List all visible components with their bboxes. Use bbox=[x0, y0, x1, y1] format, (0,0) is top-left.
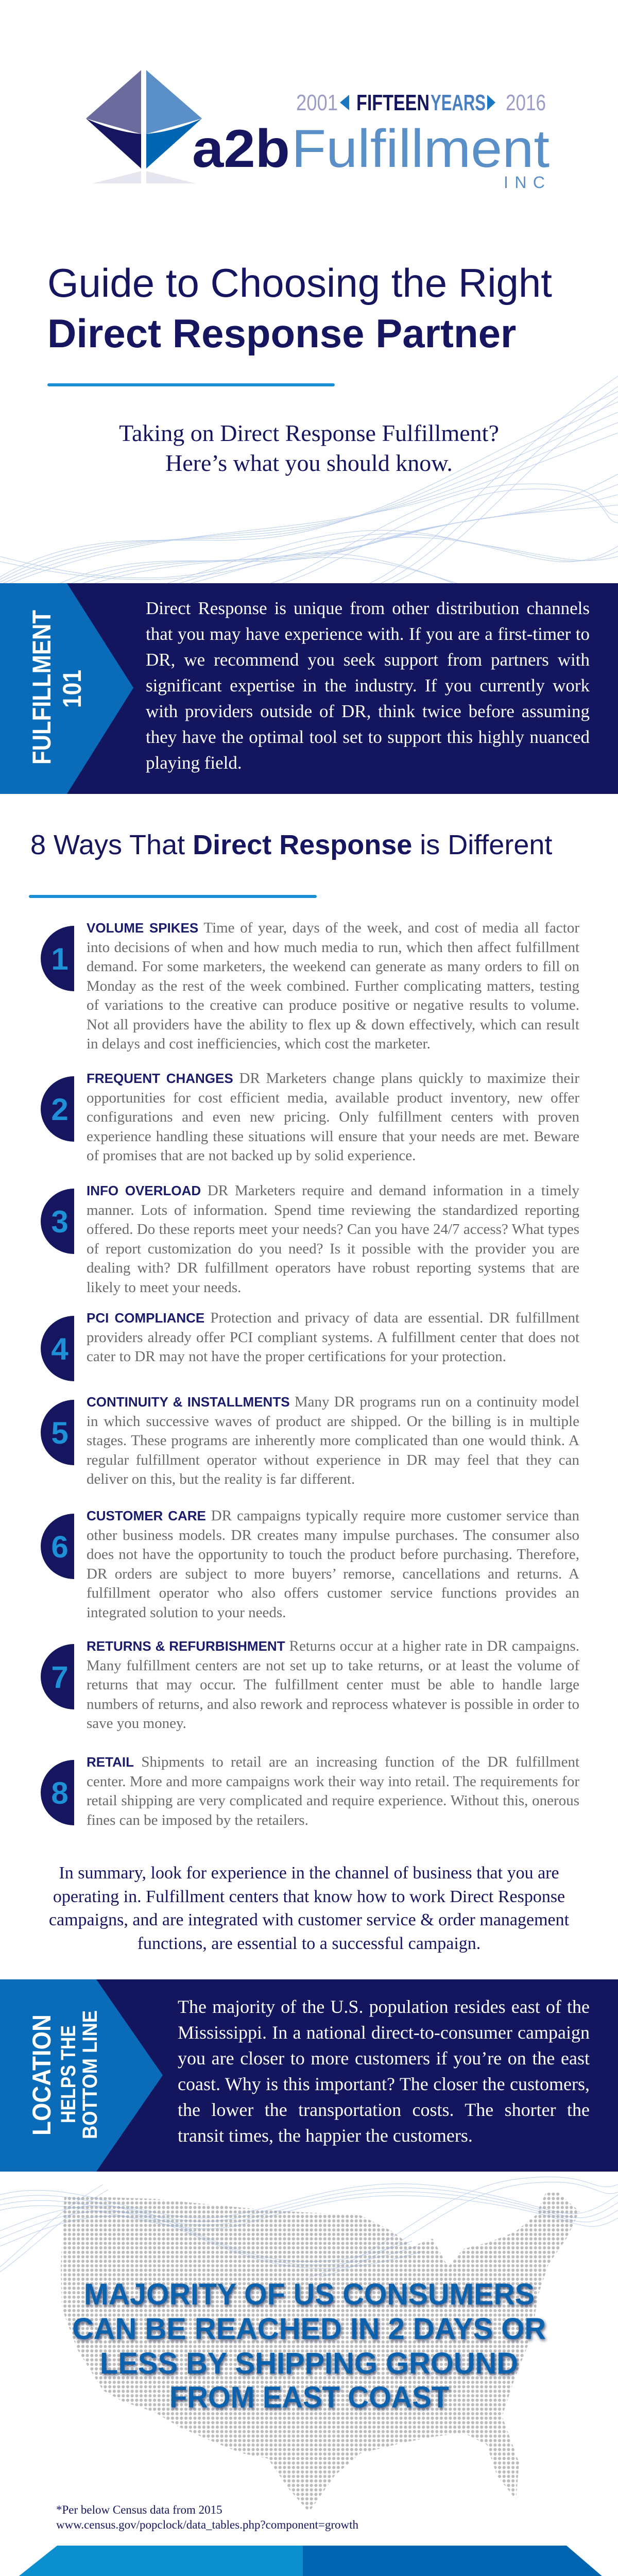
panel: location bbox=[0, 1979, 618, 2172]
icon: number 2: 2 bbox=[51, 1092, 68, 1127]
item 7: RETURNS & REFURBISHMENT Returns occur at a higher rate in DR campaigns. Many fulfillment centers are not set up to take returns, or at least the volume of returns that may occur. The fulfillment center must be able to handle large numbers of returns, and also rework and reprocess whatever is possible in order to save you money. bbox=[87, 1638, 579, 1732]
logo bbox=[86, 70, 550, 192]
subtitle bbox=[119, 420, 499, 476]
panel: fulfillment 101 bbox=[0, 583, 618, 794]
fifteen years tagline: FIFTEEN bbox=[356, 90, 430, 115]
icon: number 7 bbox=[41, 1644, 74, 1709]
waves over map bbox=[0, 2177, 618, 2277]
icon: number 5: 5 bbox=[51, 1416, 68, 1450]
headline on map: FROM EAST COAST bbox=[169, 2381, 449, 2414]
label: location helps the bottom line: LOCATION bbox=[27, 2014, 56, 2136]
icon: number 1: 1 bbox=[51, 942, 68, 976]
footnote: www.census.gov/popclock/data_tables.php?component=growth bbox=[56, 2518, 358, 2531]
icon: number 6 bbox=[41, 1514, 74, 1579]
label: location helps the bottom line: HELPS THE bbox=[57, 2025, 80, 2123]
text: location: The majority of the U.S. population resides east of the Mississippi. In a national direct-to-consumer campaign you are closer to more customers if you’re on the east coast. Why is this important? The closer the customers, the lower the transportation costs. The shorter the transit times, the happier the customers. bbox=[178, 1996, 590, 2146]
label: location helps the bottom line: BOTTOM LINE bbox=[79, 2010, 101, 2139]
label: fulfillment 101: 101 bbox=[58, 670, 87, 708]
title bbox=[47, 260, 552, 356]
item 8: RETAIL Shipments to retail are an increasing function of the DR fulfillment center. More and more campaigns work their way into retail. The requirements for retail shipping are very complicated and require experience. Without this, onerous fines can be imposed by the retailers. bbox=[87, 1754, 579, 1828]
map: dotted US with headline bbox=[0, 2176, 618, 2510]
item 5: CONTINUITY & INSTALLMENTS Many DR programs run on a continuity model in which successive waves of product are shipped. Or the billing is in multiple stages. These programs are inherently more complicated than one would think. A regular fulfillment operator without experience in DR may feel that they can deliver on this, but the reality is far different. bbox=[87, 1394, 579, 1487]
item 2: FREQUENT CHANGES DR Marketers change plans quickly to maximize their opportunities for cost efficient media, available product inventory, new offer configurations and even new pricing. Only fulfillment centers with proven experience handling these situations will ensure that your needs are met. Beware of promises that are not backed up by solid experience. bbox=[87, 1070, 579, 1164]
item 4: PCI COMPLIANCE Protection and privacy of data are essential. DR fulfillment providers already offer PCI compliant systems. A fulfillment center that does not cater to DR may not have the proper certifications for your protection. bbox=[87, 1310, 579, 1365]
label: fulfillment 101: FULFILLMENT bbox=[27, 610, 56, 765]
icon: number 4: 4 bbox=[51, 1332, 68, 1366]
icon: number 1 bbox=[41, 926, 74, 991]
headline on map: MAJORITY OF US CONSUMERS bbox=[84, 2278, 535, 2311]
summary text: In summary, look for experience in the channel of business that you are operating in. Fulfillment centers that know how to work Direct Response campaigns, and are integrated with customer service & order management functions, are essential to a successful campaign. bbox=[49, 1863, 569, 1953]
banner: west vs east bbox=[19, 2546, 602, 2576]
subtitle: Here’s what you should know. bbox=[165, 450, 453, 476]
icon: number 4 bbox=[41, 1316, 74, 1381]
text: fulfillment 101: Direct Response is unique from other distribution channels that you may have experience with. If you are a first-timer to DR, we recommend you seek support from partners with significant expertise in the industry. If you currently work with providers outside of DR, think twice before assuming they have the optimal tool set to support this highly nuanced playing field. bbox=[146, 598, 590, 773]
fifteen years tagline: YEARS bbox=[431, 90, 486, 115]
company name: a2b bbox=[192, 119, 290, 179]
company name: Fulfillment bbox=[291, 119, 550, 179]
subtitle: Taking on Direct Response Fulfillment? bbox=[119, 420, 499, 446]
icon: number 2 bbox=[41, 1076, 74, 1142]
icon: number 8: 8 bbox=[51, 1776, 68, 1810]
fifteen years tagline bbox=[296, 90, 546, 115]
company name bbox=[192, 119, 550, 192]
icon: diamond bbox=[86, 70, 202, 183]
footnote: *Per below Census data from 2015 bbox=[56, 2503, 222, 2516]
company name: INC bbox=[504, 173, 545, 192]
headline on map: CAN BE REACHED IN 2 DAYS OR bbox=[72, 2312, 546, 2346]
item 3: INFO OVERLOAD DR Marketers require and demand information in a timely manner. Lots of information. Spend time reviewing the standardized reporting offered. Do these reports meet your needs? Can you have 24/7 access? What types of report customization do you need? Is it possible with the provider you are dealing with? DR fulfillment operators have robust reporting systems that are likely to meet your needs. bbox=[87, 1182, 579, 1295]
label: fulfillment 101 bbox=[27, 610, 87, 765]
icon: number 5 bbox=[41, 1400, 74, 1465]
title: Direct Response Partner bbox=[47, 311, 516, 356]
icon: number 3 bbox=[41, 1189, 74, 1254]
icon: number 8 bbox=[41, 1760, 74, 1825]
item 6: CUSTOMER CARE DR campaigns typically require more customer service than other business models. DR creates many impulse purchases. The consumer also does not have the opportunity to touch the product before purchasing. Therefore, DR orders are subject to more buyers’ remorse, cancellations and returns. A fulfillment operator who also offers customer service functions provides an integrated solution to your needs. bbox=[87, 1507, 579, 1621]
footnote bbox=[56, 2503, 358, 2531]
icon: number 7: 7 bbox=[51, 1660, 68, 1694]
icon: number 3: 3 bbox=[51, 1205, 68, 1239]
heading: 8 ways: 8 Ways That Direct Response is Different bbox=[30, 829, 552, 860]
headline on map bbox=[72, 2278, 546, 2414]
icon: number 6: 6 bbox=[51, 1530, 68, 1564]
fifteen years tagline: 2016 bbox=[506, 90, 546, 115]
label: location helps the bottom line bbox=[27, 2010, 101, 2139]
headline on map: LESS BY SHIPPING GROUND bbox=[100, 2347, 518, 2380]
fifteen years tagline: 2001 bbox=[296, 90, 338, 115]
item 1: VOLUME SPIKES Time of year, days of the week, and cost of media all factor into decisions of when and how much media to run, which then affect fulfillment demand. For some marketers, the weekend can generate as many orders to fill on Monday as the rest of the week combined. Further complicating matters, testing of variations to the creative can produce positive or negative results to volume. Not all providers have the ability to flex up & down effectively, which can result in delays and cost inefficiencies, which cost the marketer. bbox=[87, 920, 579, 1052]
title: Guide to Choosing the Right bbox=[47, 260, 552, 306]
background waves top bbox=[0, 376, 618, 583]
